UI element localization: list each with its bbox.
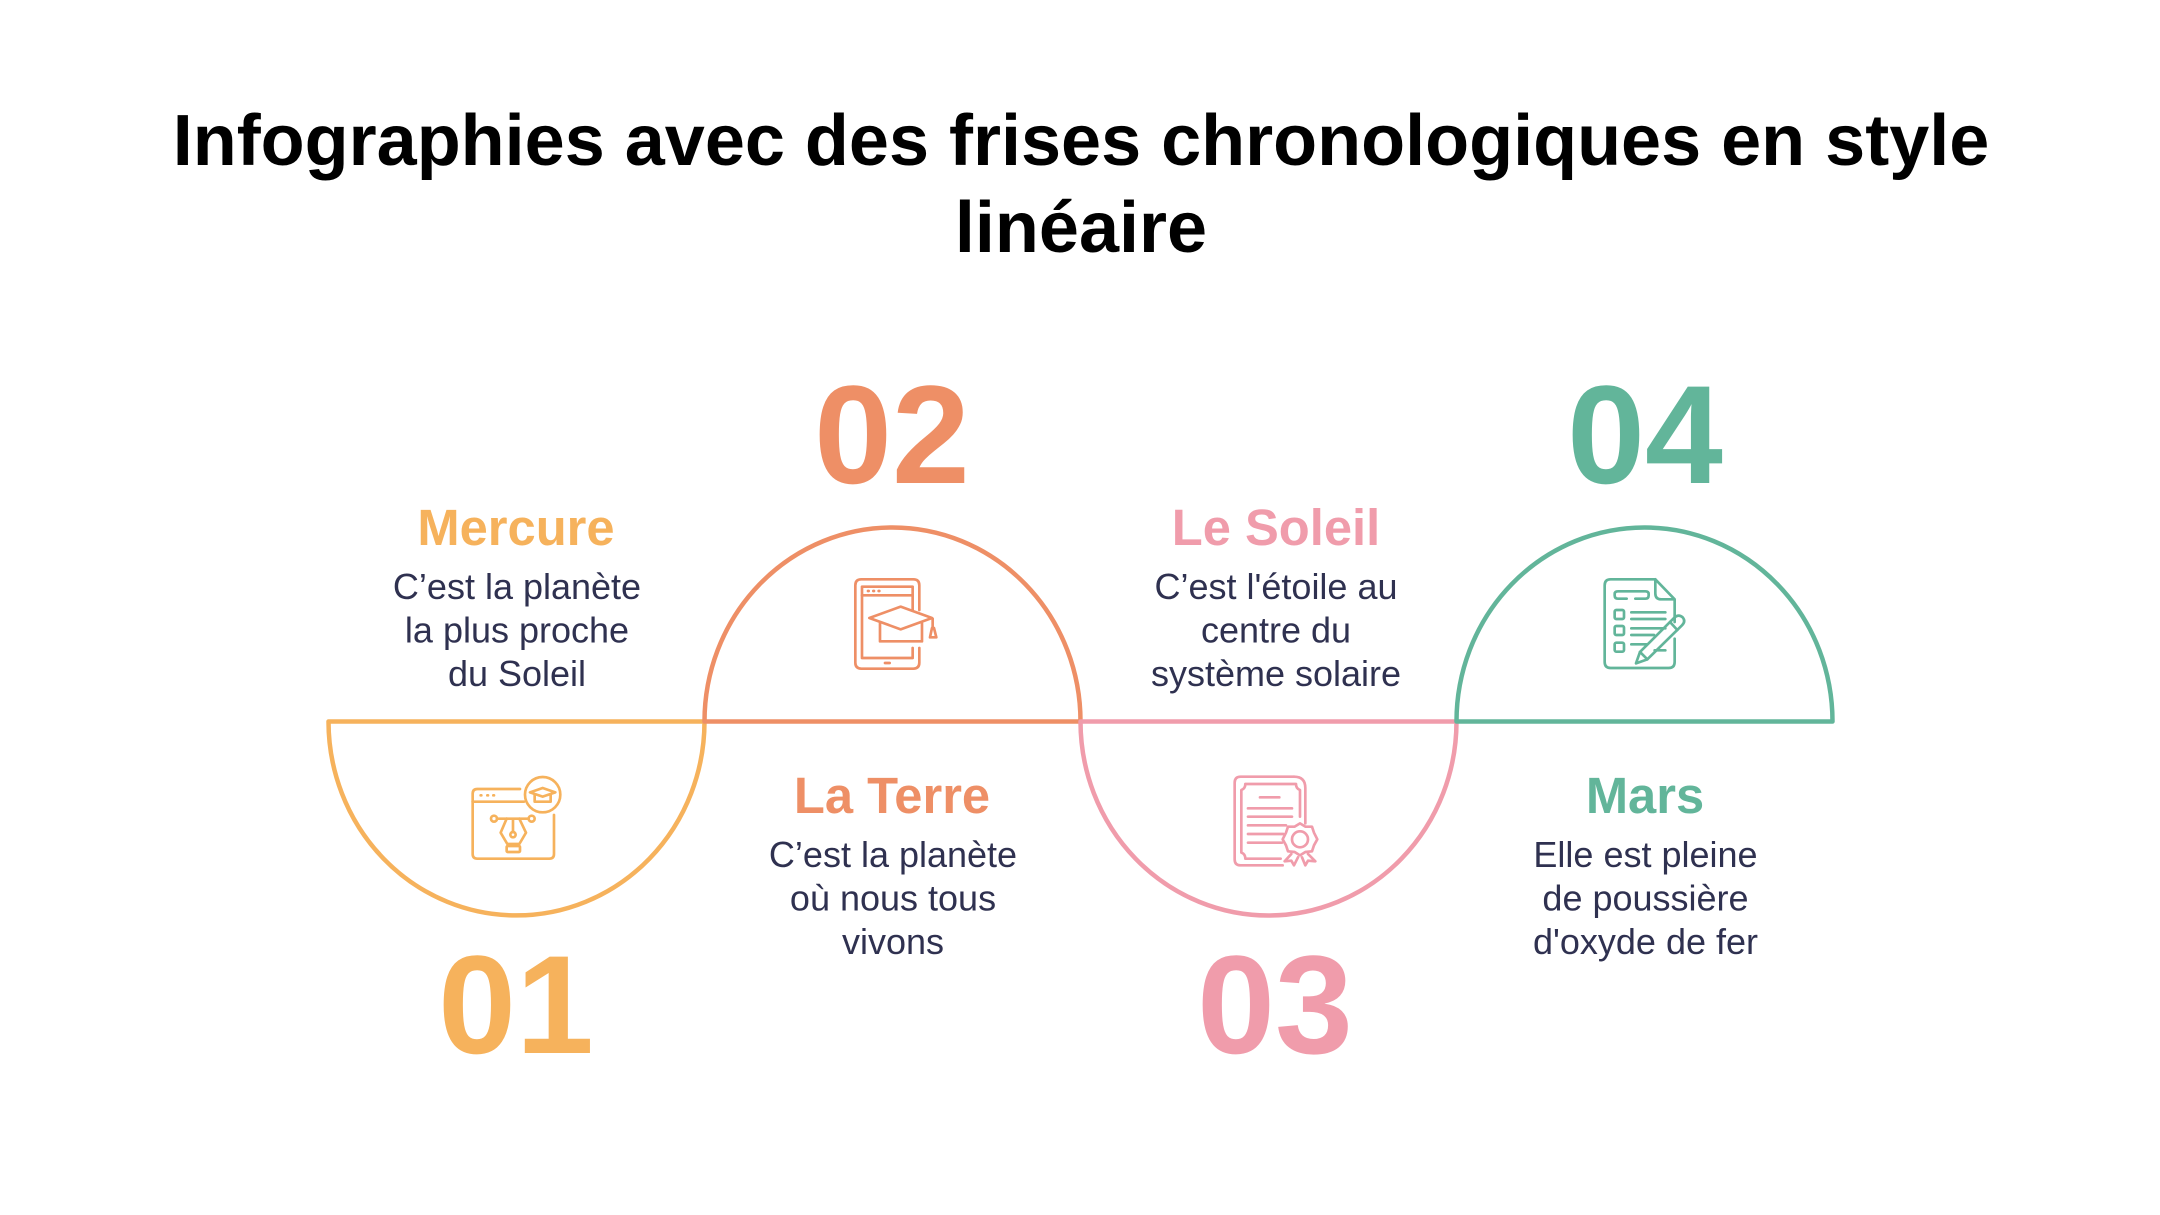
number 03: 03 xyxy=(1197,926,1353,1083)
semicircle 04 xyxy=(1456,528,1832,722)
text block: Mars: Elle est pleine xyxy=(1533,834,1758,875)
text block: La Terre: vivons xyxy=(842,921,944,962)
text block: Le Soleil: système solaire xyxy=(1151,653,1401,694)
number 01: 01 xyxy=(438,926,594,1083)
number 04: 04 xyxy=(1567,356,1723,513)
text block: Mars: d'oxyde de fer xyxy=(1533,921,1758,962)
text block: Mercure: du Soleil xyxy=(448,653,586,694)
text block: La Terre: C’est la planète xyxy=(769,834,1017,875)
text block: Mercure xyxy=(393,499,641,694)
text block: La Terre: La Terre xyxy=(794,767,990,824)
text block: Le Soleil: centre du xyxy=(1201,610,1351,650)
title: linéaire xyxy=(955,188,1207,268)
text block: Le Soleil: Le Soleil xyxy=(1172,499,1380,556)
text block: Mercure: C’est la planète xyxy=(393,566,641,607)
text block: Mercure: la plus proche xyxy=(405,610,629,650)
title xyxy=(173,101,1989,268)
title: Infographies avec des frises chronologiques en style xyxy=(173,101,1989,181)
text block: Le Soleil: C’est l'étoile au xyxy=(1154,566,1398,607)
text block: Mercure: Mercure xyxy=(417,499,615,556)
text block: Le Soleil xyxy=(1151,499,1401,694)
icon: browser with pen tool and graduation cap xyxy=(473,777,560,859)
text block: La Terre xyxy=(769,767,1017,962)
icon: tablet with graduation cap xyxy=(855,579,936,669)
semicircle 02 xyxy=(704,528,1080,722)
text block: Mars: de poussière xyxy=(1542,878,1749,918)
text block: La Terre: où nous tous xyxy=(790,878,996,918)
semicircle 03 xyxy=(1080,722,1456,916)
icon: certificate with rosette xyxy=(1235,777,1317,865)
semicircle 01 xyxy=(328,722,704,915)
text block: Mars: Mars xyxy=(1586,767,1704,824)
icon: checklist with pencil xyxy=(1605,579,1684,668)
text block: Mars xyxy=(1533,767,1758,962)
number 02: 02 xyxy=(814,356,970,513)
